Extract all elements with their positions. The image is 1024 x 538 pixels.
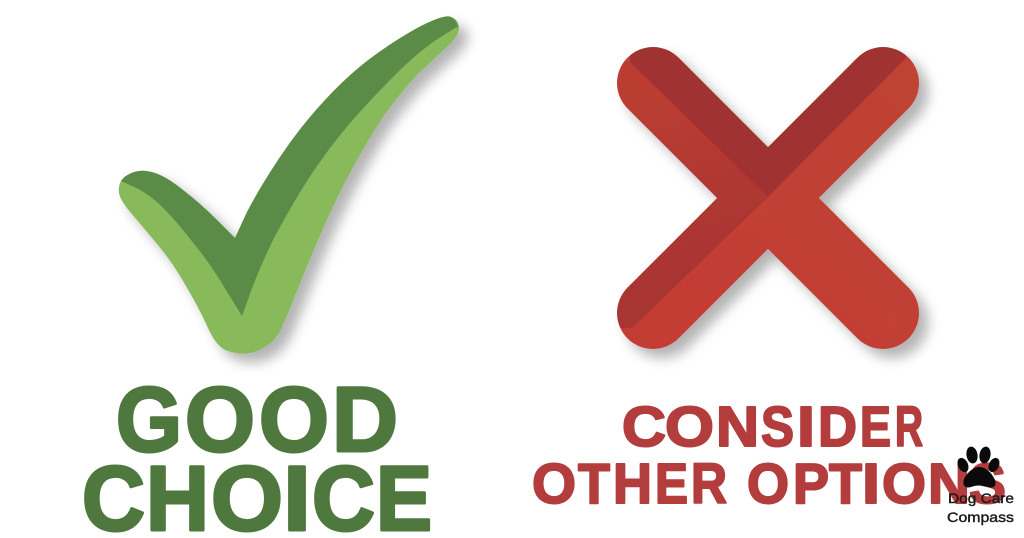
heading: good choice: O [259,369,329,471]
heading: consider other options: I [862,452,880,516]
heading: consider other options: T [578,452,610,516]
heading: consider other options: S [969,452,1006,516]
logo text: Compass [947,509,1014,525]
heading: good choice [82,369,432,538]
heading: consider other options: S [761,395,794,459]
X mark top dark facet [630,47,906,197]
heading: consider other options [532,395,1006,516]
heading: consider other options: I [797,395,815,459]
heading: consider other options: C [622,395,666,459]
X mark left facet [617,103,768,328]
check mark dark face [121,16,458,316]
heading: consider other options: P [793,452,829,516]
heading: consider other options: R [895,395,923,459]
heading: consider other options: O [882,452,926,516]
logo text: Dog Care [948,490,1014,506]
heading: consider other options: O [532,452,576,516]
heading: good choice: O [185,369,255,471]
heading: good choice: G [116,369,182,471]
logo: Dog Care Compass [947,446,1014,525]
heading: consider other options: D [818,395,857,459]
logo text [947,490,1014,525]
heading: consider other options: E [655,452,688,516]
icon: green check mark [119,16,459,354]
heading: good choice: D [332,369,398,471]
X mark base face [620,56,935,365]
icon: red X mark [617,47,935,365]
heading: consider other options: T [829,452,862,516]
heading: consider other options: N [716,395,759,459]
heading: consider other options: E [860,395,891,459]
heading: consider other options: R [691,452,727,516]
heading: consider other options: O [747,452,789,516]
heading: consider other options: N [928,452,970,516]
heading: consider other options: H [613,452,652,516]
icon: paw print [955,446,1002,488]
heading: consider other options: O [665,395,714,459]
check mark light face [119,16,459,354]
